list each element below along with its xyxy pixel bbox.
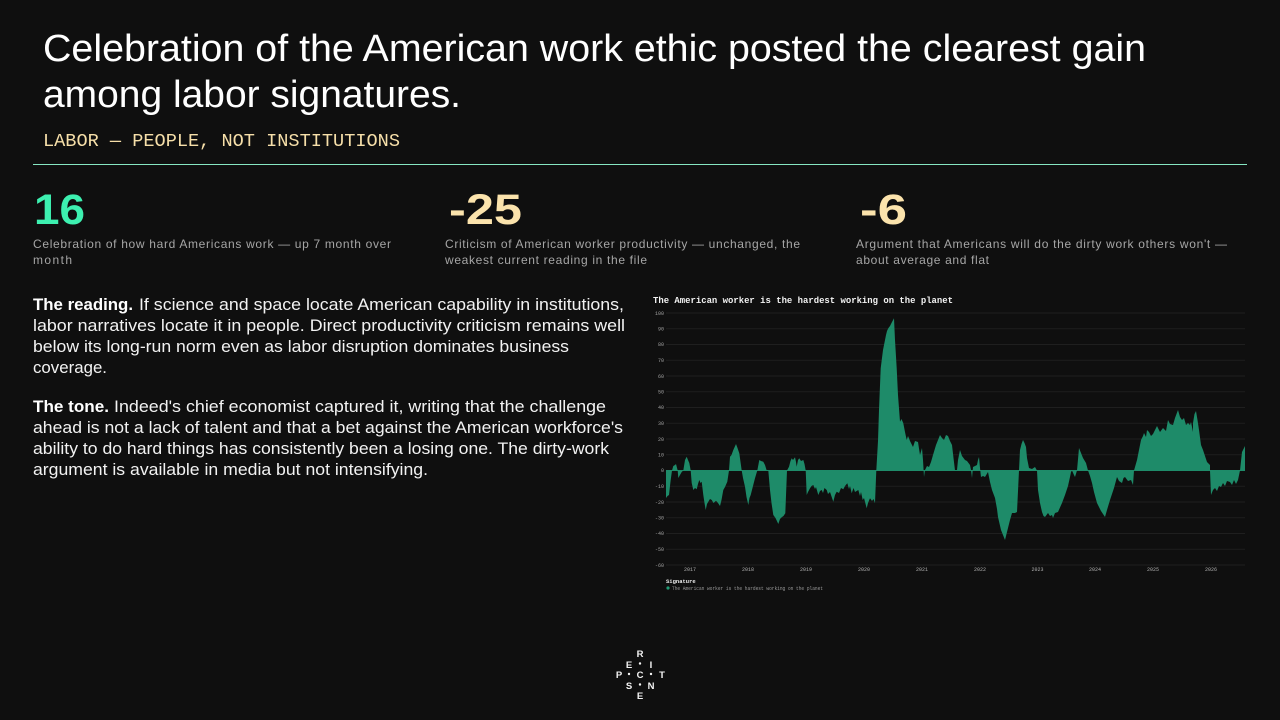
- x axis labels: 2024: [1089, 567, 1101, 573]
- y axis labels: 10: [658, 452, 664, 458]
- area series: [666, 318, 1245, 540]
- text block: the reading: below its long-run norm even as labor disruption dominates business: [33, 338, 569, 356]
- logo: I: [650, 660, 652, 671]
- y axis labels: 100: [655, 311, 664, 317]
- text block: the reading: coverage.: [33, 359, 107, 377]
- y axis labels: -60: [655, 563, 664, 569]
- stat value: 16: 16: [34, 186, 85, 234]
- x axis labels: [684, 567, 1217, 573]
- y axis labels: -20: [655, 500, 664, 506]
- stat value: -25: -25: [449, 186, 522, 234]
- logo: [616, 649, 665, 702]
- text block: the tone: Indeed's chief economist captured it, writing that the challenge: [114, 398, 606, 416]
- x axis labels: 2026: [1205, 567, 1217, 573]
- y axis labels: -10: [655, 484, 664, 490]
- panel: stat 16: [33, 186, 391, 267]
- stat caption: dirty work: about average and flat: [856, 253, 990, 267]
- panel: stat -25: [444, 186, 800, 267]
- x axis labels: 2018: [742, 567, 754, 573]
- y axis labels: 80: [658, 342, 664, 348]
- y axis labels: -30: [655, 516, 664, 522]
- panel: stat -6: [856, 186, 1227, 267]
- legend: [666, 578, 823, 592]
- logo: C: [637, 670, 644, 681]
- text block: the reading: The reading.: [33, 296, 133, 314]
- y axis labels: -50: [655, 547, 664, 553]
- area chart: the American worker: [653, 295, 1245, 592]
- stat caption: criticism: [444, 237, 800, 267]
- stat caption: criticism: weakest current reading in the file: [444, 253, 647, 267]
- x axis labels: 2022: [974, 567, 986, 573]
- stat caption: celebration: month: [33, 253, 72, 267]
- x axis labels: 2025: [1147, 567, 1159, 573]
- legend: The American worker is the hardest working on the planet: [672, 586, 823, 592]
- logo: E: [637, 691, 643, 702]
- y axis labels: 70: [658, 358, 664, 364]
- y axis labels: 40: [658, 405, 664, 411]
- x axis labels: 2023: [1031, 567, 1044, 573]
- stat caption: celebration: Celebration of how hard Americans work — up 7 month over: [33, 237, 391, 251]
- logo: E: [626, 660, 632, 671]
- y axis labels: 50: [658, 390, 664, 396]
- y axis labels: 20: [658, 437, 664, 443]
- logo: R: [637, 649, 644, 660]
- text block: the reading: labor narratives locate it in people. Direct productivity criticism remains well: [33, 317, 625, 335]
- subtitle: LABOR — PEOPLE, NOT INSTITUTIONS: [43, 131, 400, 152]
- y axis labels: -40: [655, 531, 664, 537]
- logo: T: [659, 670, 665, 681]
- x axis labels: 2017: [684, 567, 696, 573]
- y axis labels: 0: [661, 468, 664, 474]
- stat caption: celebration: [33, 237, 391, 267]
- text block: the tone: [33, 398, 623, 479]
- y axis labels: 90: [658, 326, 664, 332]
- text block: the tone: ability to do hard things has consistently been a losing one. The dirty-work: [33, 440, 610, 458]
- text block: the tone: ahead is not a lack of talent and that a bet against the American workforce's: [33, 419, 623, 437]
- logo: P: [616, 670, 623, 681]
- stat value: -6: -6: [860, 186, 907, 234]
- x axis labels: 2020: [858, 567, 870, 573]
- stat caption: criticism: Criticism of American worker productivity — unchanged, the: [445, 237, 800, 251]
- title: [43, 28, 1146, 116]
- logo: S: [626, 681, 632, 692]
- x axis labels: 2021: [916, 567, 928, 573]
- title: among labor signatures.: [43, 74, 461, 116]
- y axis labels: 60: [658, 374, 664, 380]
- stat caption: dirty work: [856, 237, 1227, 267]
- stat caption: dirty work: Argument that Americans will do the dirty work others won't —: [856, 237, 1227, 251]
- y axis labels: 30: [658, 421, 664, 427]
- text block: the reading: [33, 296, 625, 377]
- legend: Signature: [666, 578, 696, 585]
- logo: N: [648, 681, 655, 692]
- title: Celebration of the American work ethic posted the clearest gain: [43, 28, 1146, 70]
- chart title: The American worker is the hardest working on the planet: [653, 295, 953, 306]
- text block: the tone: The tone.: [33, 398, 109, 416]
- text block: the reading: If science and space locate American capability in institutions,: [139, 296, 624, 314]
- y axis labels: [655, 311, 664, 569]
- text block: the tone: argument is available in media but not intensifying.: [33, 461, 428, 479]
- x axis labels: 2019: [800, 567, 812, 573]
